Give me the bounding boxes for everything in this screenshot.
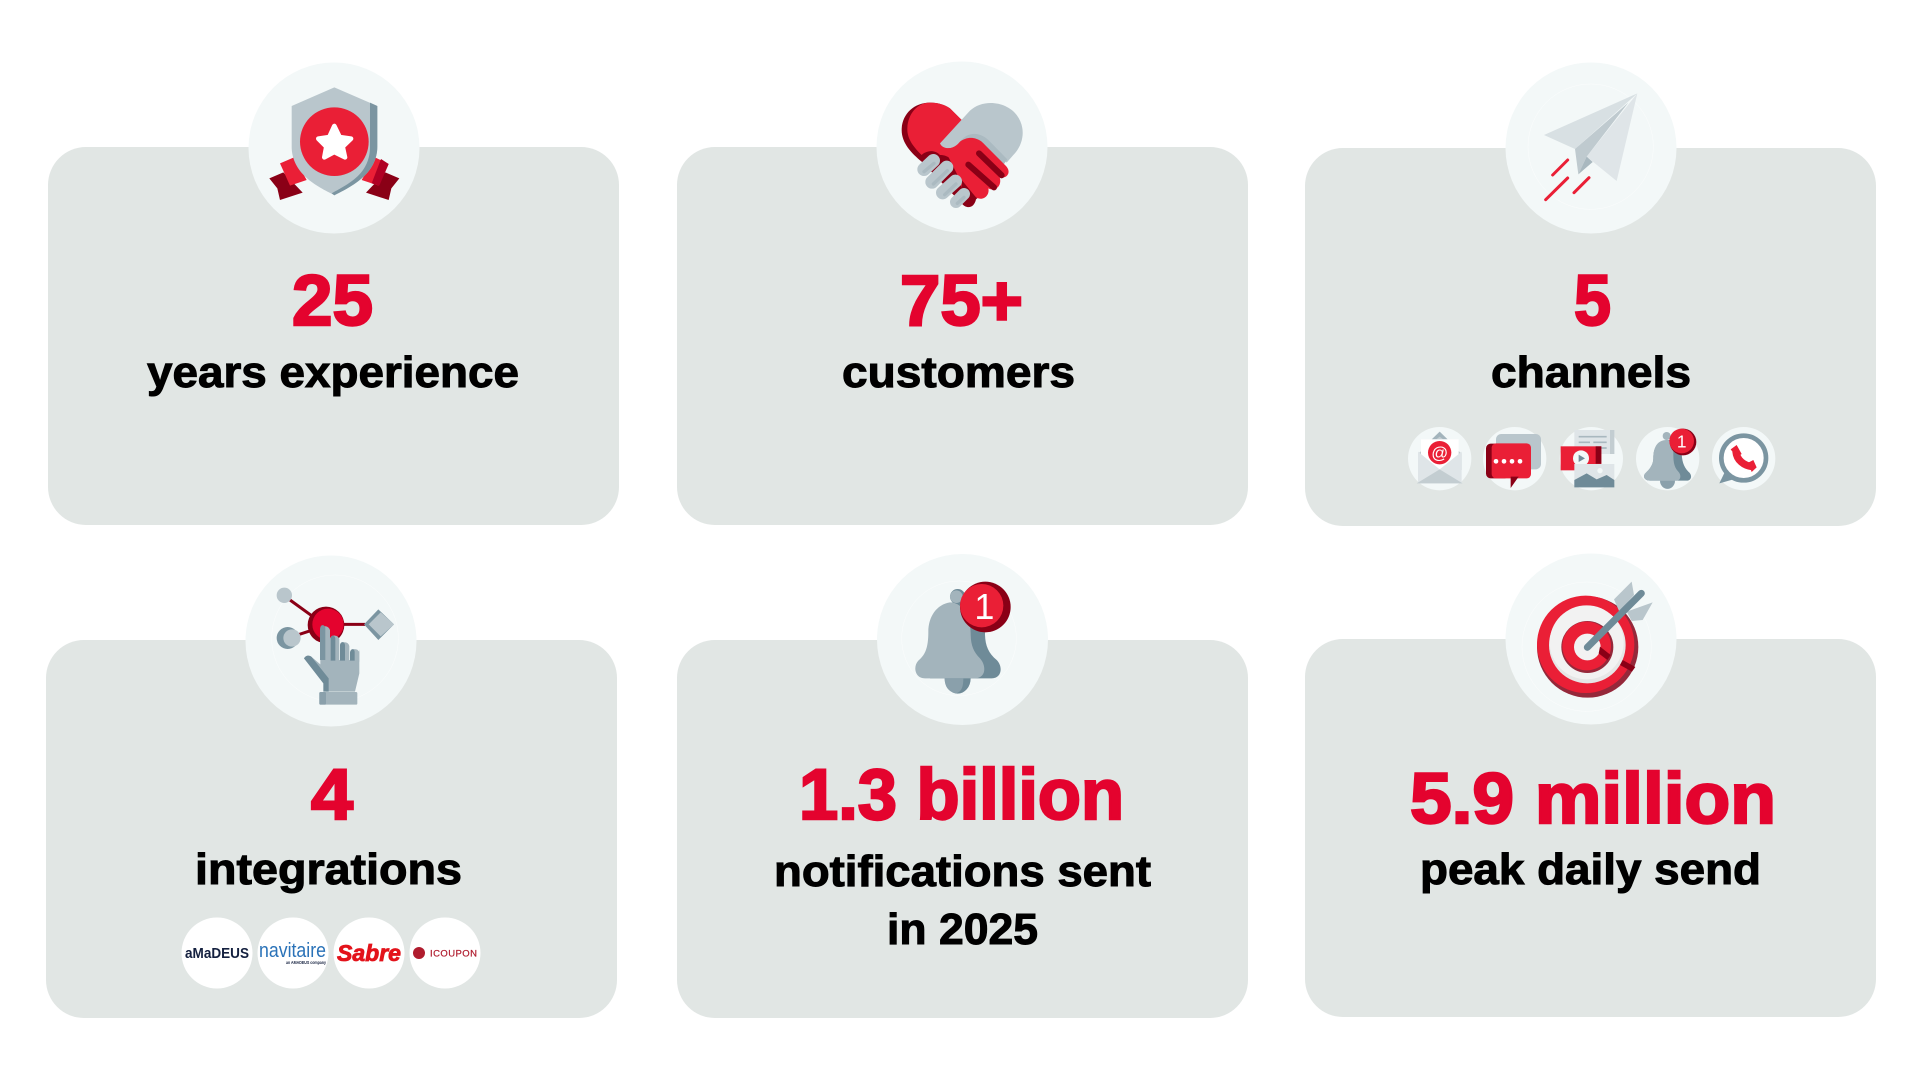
label: notifications sent in 2025: notifications sent (774, 847, 1151, 896)
icon: email: @ (1431, 444, 1448, 463)
panel: 75+ customers (677, 62, 1248, 525)
panel: 25 years experience (48, 62, 619, 525)
logo: Sabre: Sabre (337, 940, 401, 966)
icon: notification bell: 1 (1677, 431, 1686, 451)
stat: 5: 5 (1574, 262, 1611, 341)
logo: Navitaire: an AMADEUS company (286, 960, 326, 965)
integration logos row (182, 918, 480, 988)
label: channels: channels (1491, 348, 1691, 397)
stat: 1.3 billion: 1.3 billion (799, 756, 1124, 835)
icon: hand touching network (246, 556, 416, 726)
icon: email (1408, 427, 1471, 490)
label: integrations: integrations (195, 845, 462, 894)
logo: iCoupon: ICOUPON (430, 948, 477, 960)
logo: Sabre (334, 918, 404, 988)
icon: notification bell (1636, 427, 1699, 490)
panel: 4 integrations (46, 556, 617, 1018)
icon: bell with badge (877, 554, 1048, 725)
icon: phone chat (1712, 427, 1775, 490)
icon: rich media (1560, 427, 1623, 490)
logo: Navitaire: navitaire (259, 940, 326, 962)
icon: bell with badge: 1 (974, 586, 994, 627)
logo: Amadeus: aMaDEUS (185, 946, 249, 962)
icon: target with arrow (1506, 554, 1676, 724)
logo: Navitaire (258, 918, 328, 988)
channel icons row (1408, 427, 1775, 490)
panel: 5 channels (1305, 62, 1876, 526)
icon: handshake heart (876, 62, 1048, 232)
stat: 25: 25 (292, 262, 373, 341)
panel: 5.9 million peak daily send (1305, 554, 1876, 1017)
logo: Amadeus (182, 918, 252, 988)
label: peak daily send: peak daily send (1420, 845, 1761, 894)
label: customers: customers (842, 348, 1075, 397)
stat: 75+: 75+ (900, 262, 1023, 341)
label: years experience: years experience (147, 348, 519, 397)
label: notifications sent in 2025 (774, 847, 1151, 954)
icon: shield badge with star (248, 62, 420, 234)
label: notifications sent in 2025: in 2025 (887, 905, 1038, 954)
stat: 4: 4 (311, 756, 354, 835)
stat: 5.9 million: 5.9 million (1410, 760, 1776, 839)
icon: paper plane (1506, 62, 1676, 234)
icon: chat bubbles (1483, 427, 1546, 490)
logo: iCoupon (410, 918, 480, 988)
panel: 1.3 billion notifications (677, 554, 1248, 1018)
